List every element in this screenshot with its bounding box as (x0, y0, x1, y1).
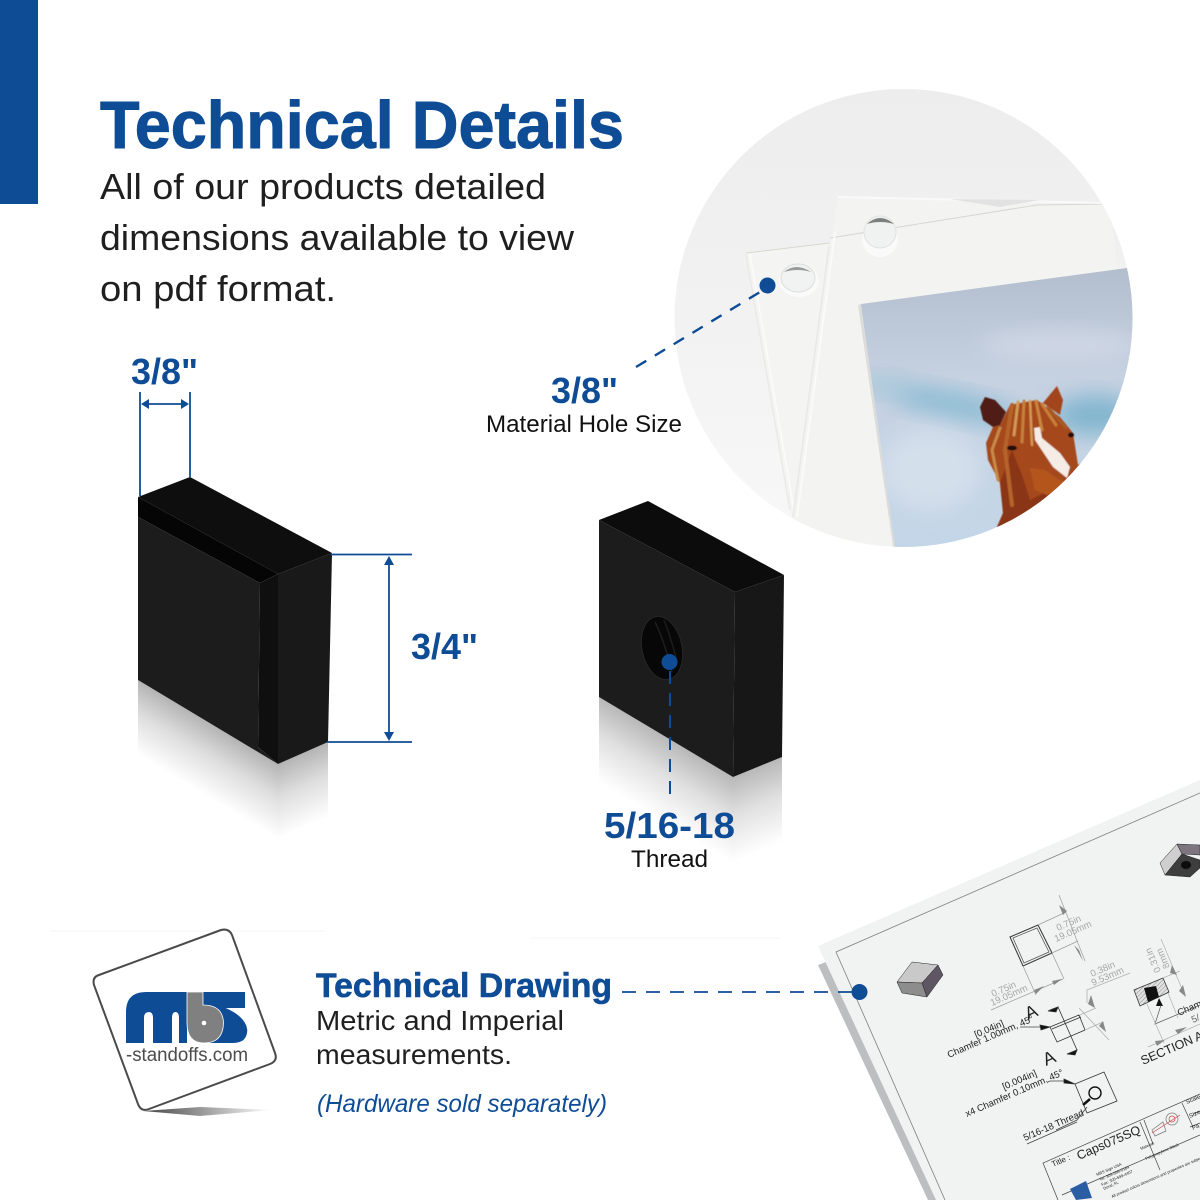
dimension labels: 8mm (1154, 946, 1173, 970)
sheet paper (818, 780, 1200, 1200)
chamfer band (138, 497, 278, 583)
title block label (1050, 1094, 1200, 1199)
title block label: Polypropylene Black (1144, 1142, 1180, 1161)
drawing: side view with section marks (1020, 973, 1130, 1055)
dimension labels: 19.05mm (1053, 919, 1094, 945)
inner border (836, 793, 1200, 1200)
horse mane (992, 401, 1066, 505)
drawing: hole view (1027, 1072, 1117, 1144)
threaded hole (636, 613, 688, 683)
dimension labels: 0.75in (990, 979, 1018, 1000)
logo badge (94, 930, 276, 1116)
intro text: All of our products detailed (100, 166, 546, 207)
callout: technical drawing connector (622, 984, 868, 1000)
section letters: A (1040, 1047, 1059, 1070)
logo card (94, 930, 276, 1110)
logo letter b counter (202, 1021, 206, 1025)
callout: thread (604, 654, 735, 873)
dimension: height 3/4 (327, 554, 478, 742)
photo print shadow (858, 304, 896, 547)
dimension: width 3/8 (131, 351, 198, 496)
horse ears (980, 397, 1006, 427)
drawing: top view with dimensions (991, 895, 1085, 1010)
callout: thread: Thread (631, 846, 708, 873)
drawing: section A view (1134, 939, 1200, 1068)
icon: clear bumper left (780, 264, 816, 292)
reflection under front face (138, 680, 278, 845)
callout: thread: 5/16-18 (604, 805, 735, 846)
dimension: width 3/8: 3/8" (131, 351, 198, 392)
panel: circular product photo (674, 89, 1132, 547)
accent bar (0, 0, 38, 204)
marker dot (852, 984, 868, 1000)
marker dot (662, 654, 678, 670)
section letters (1022, 1001, 1059, 1070)
title block label: Caps075SQ (1075, 1123, 1143, 1163)
logo letter b (187, 992, 224, 1043)
section letters: A (1022, 1001, 1041, 1024)
dimension labels: 19.05mm (989, 983, 1030, 1009)
chamfer callouts: 5/16-18 Thread (1022, 1108, 1086, 1144)
dimension labels (989, 913, 1173, 1009)
dimension labels: 0.38in (1089, 959, 1117, 980)
title block label: Tel: 305-599-0164 (1098, 1164, 1131, 1182)
title block (1043, 1094, 1200, 1200)
reflection under front face (599, 697, 733, 870)
chamfer callouts: [0.04in] (973, 1018, 1006, 1041)
callout: material hole size (486, 278, 776, 438)
note: hardware sold separately: (Hardware sold separately) (317, 1090, 607, 1118)
title block label: Material: (1139, 1140, 1155, 1151)
right face (278, 553, 332, 764)
title block label: Title : (1050, 1153, 1071, 1169)
marker dot (760, 278, 776, 294)
panel: technical drawing sheet (818, 780, 1200, 1200)
front face (138, 517, 278, 764)
front face (599, 520, 735, 777)
logo wordmark: -standoffs.com (126, 1045, 248, 1066)
callout: material hole size: 3/8" (551, 370, 618, 411)
dimension labels: 9.53mm (1090, 965, 1126, 989)
horse (979, 386, 1081, 528)
top face (599, 501, 784, 592)
chamfer callouts: Chamfer 1.00mm, 45° (946, 1013, 1036, 1061)
horse head (985, 400, 1081, 527)
product: standoff cap thread view (599, 501, 784, 870)
chamfer callouts: [0.004in] (1001, 1068, 1039, 1093)
back acrylic plate (790, 197, 1150, 560)
intro text: on pdf format. (100, 268, 336, 309)
description text: measurements. (316, 1039, 512, 1070)
callout: material hole size: Material Hole Size (486, 411, 682, 438)
horse shading (996, 450, 1048, 527)
product: standoff cap side view (138, 477, 332, 845)
title: Technical Details (100, 88, 624, 163)
chamfer callouts (946, 994, 1200, 1144)
dimension labels: 0.31in (1143, 946, 1164, 974)
title block label: Doral, FL (1102, 1179, 1120, 1191)
reflection under side face (278, 742, 328, 845)
title block label: Fax: 305-599-4407 (1100, 1169, 1134, 1187)
dimension: height 3/4: 3/4" (411, 626, 478, 667)
dimension labels: 0.75in (1055, 913, 1083, 934)
chamfer callouts: x4 Chamfer 0.10mm, 45° (964, 1067, 1065, 1120)
icon: isometric block with hole (1160, 844, 1200, 877)
description text: Metric and Imperial (316, 1005, 564, 1036)
title block label: MBS Sign USA (1095, 1161, 1123, 1177)
icon: isometric block (897, 962, 943, 997)
right face (733, 575, 784, 777)
icon: clear bumper right (864, 216, 896, 248)
logo shadow (143, 1107, 272, 1116)
top face (138, 477, 332, 574)
reflection under side face (733, 757, 782, 870)
intro text: dimensions available to view (100, 217, 575, 258)
title block icon (1152, 1113, 1180, 1136)
horse blaze (1034, 427, 1070, 478)
logo letter s (203, 992, 247, 1043)
logo letter m (126, 992, 187, 1043)
description text (316, 1005, 564, 1070)
photo print with horse (861, 268, 1132, 547)
heading: technical drawing: Technical Drawing (316, 967, 612, 1005)
intro text (100, 166, 575, 309)
front acrylic plate (746, 243, 830, 517)
title block logo (1070, 1181, 1092, 1200)
horse eyes (1007, 446, 1017, 450)
sheet shadow (818, 962, 1000, 1200)
